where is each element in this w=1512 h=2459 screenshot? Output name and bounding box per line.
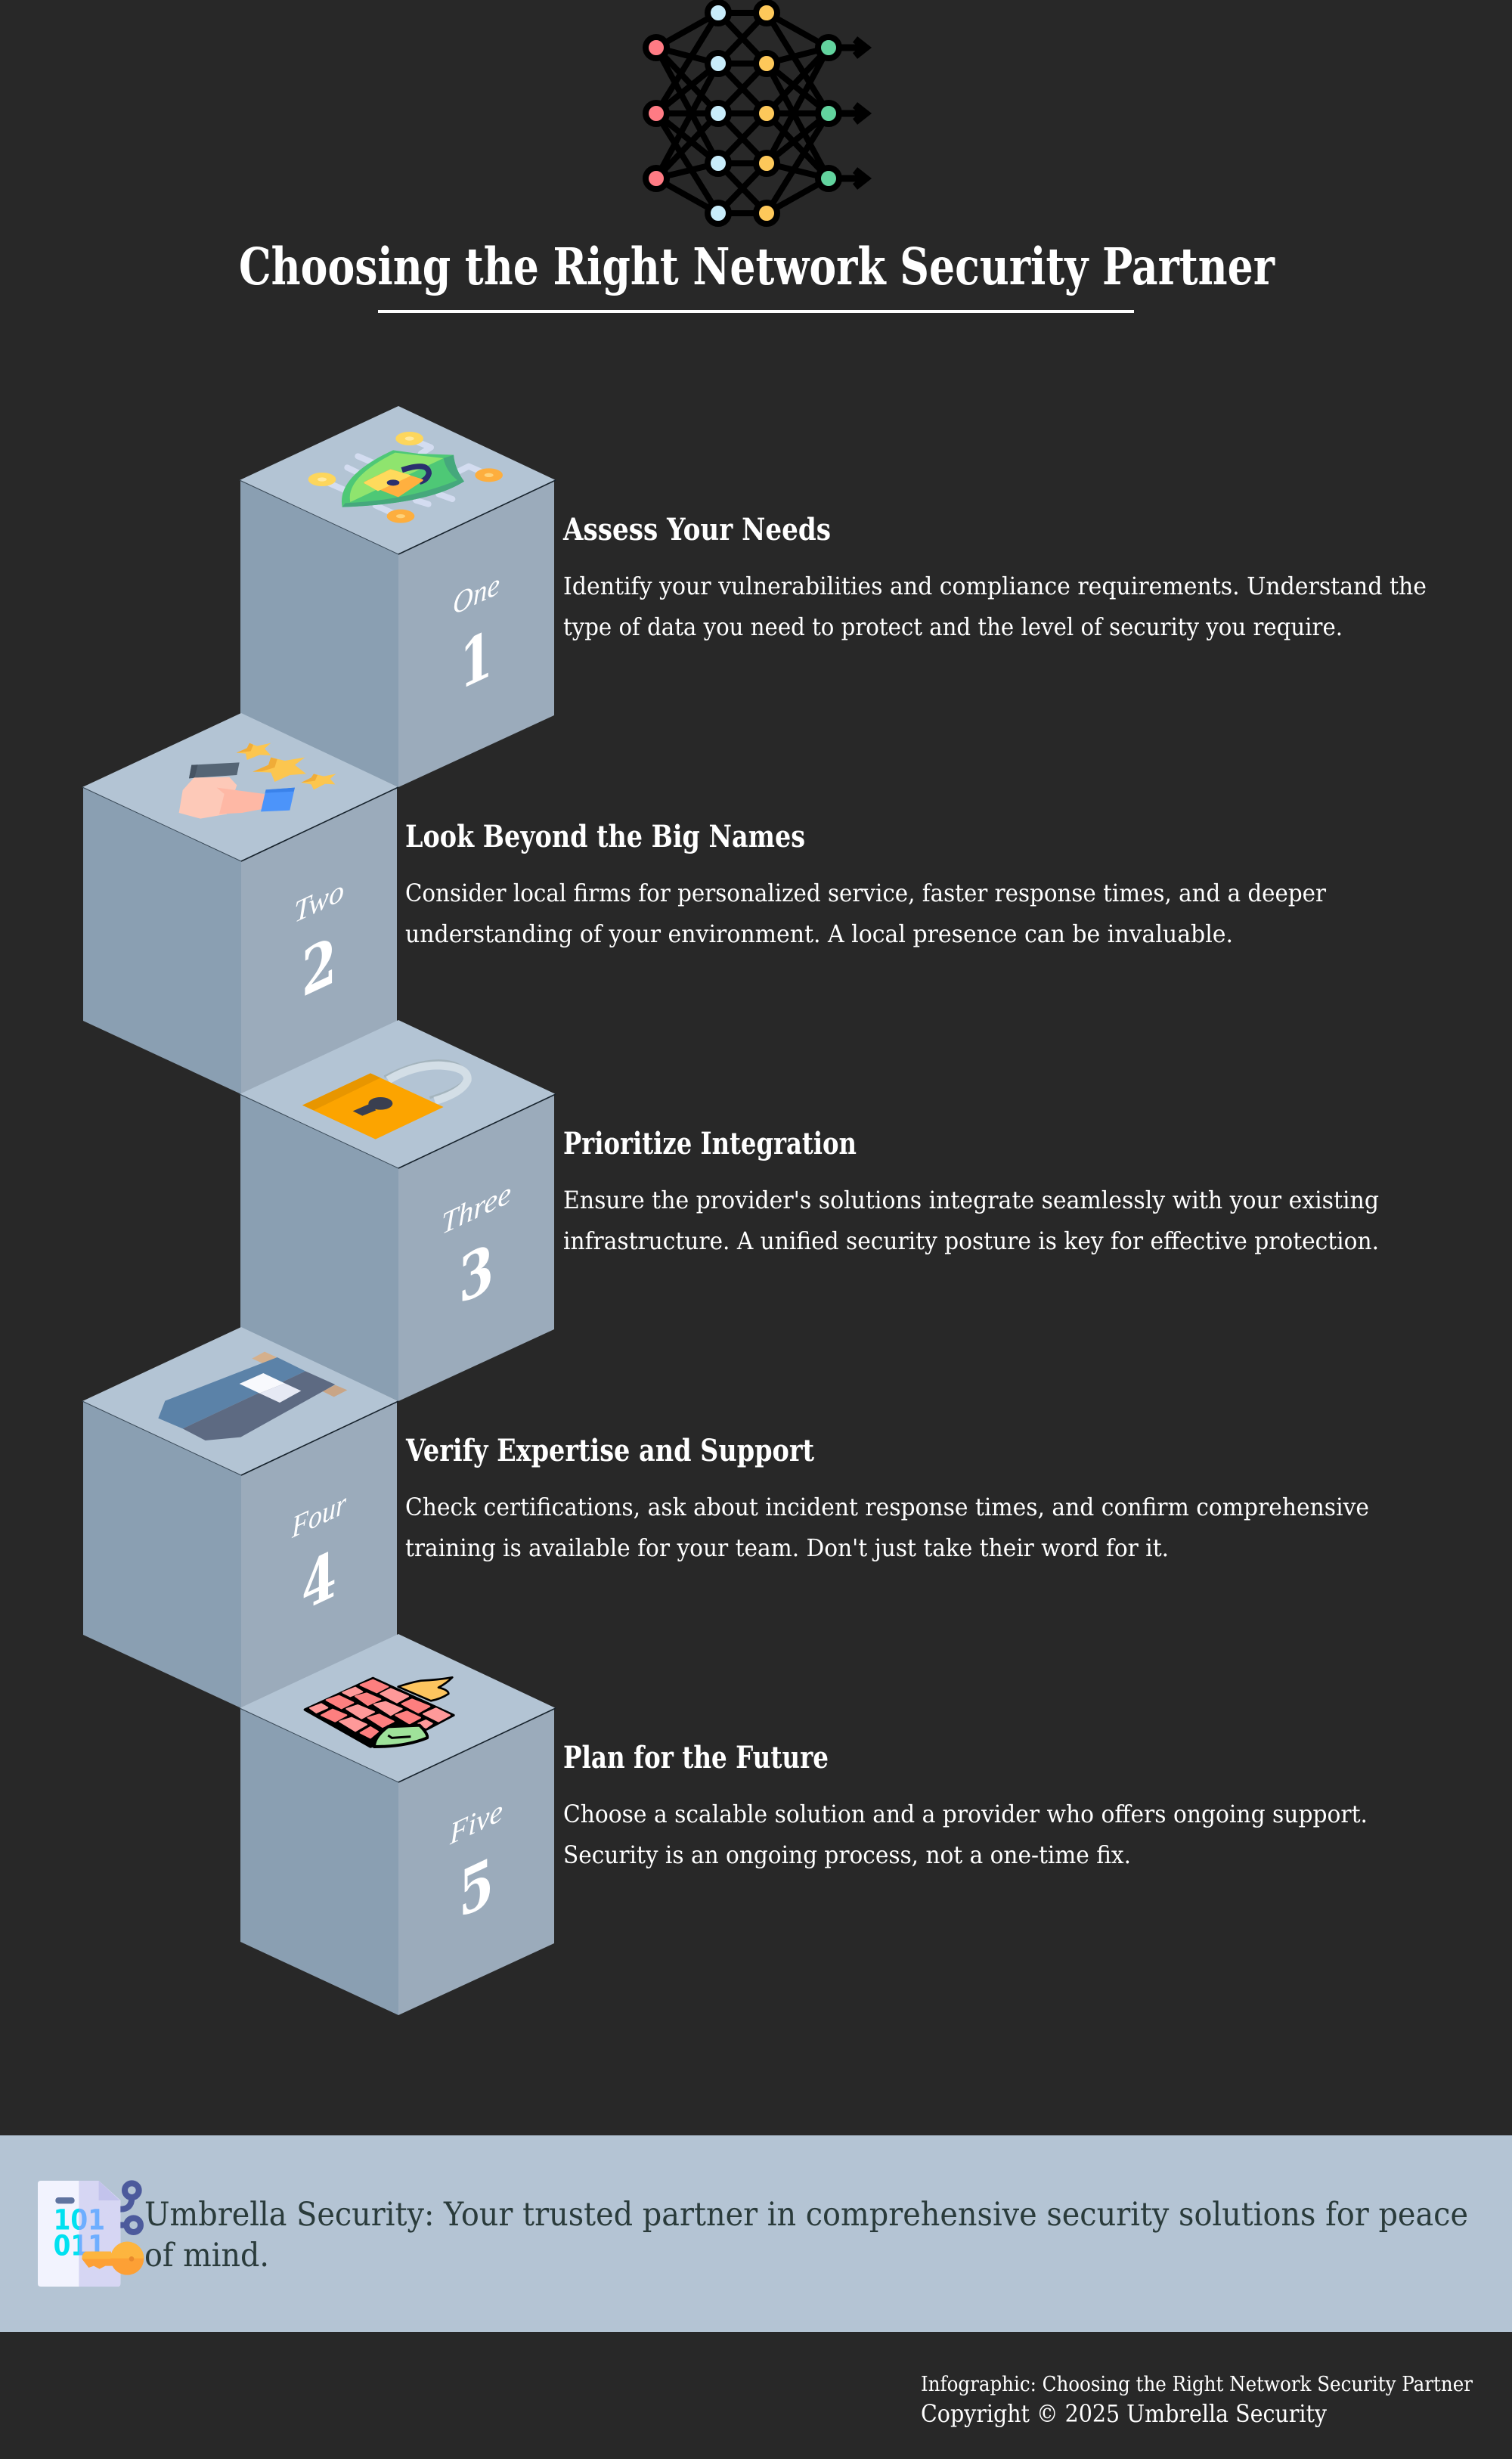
step 3 text: Prioritize Integration: [563, 1126, 857, 1161]
step number: 1: 1: [460, 615, 493, 705]
step 5 text: Choose a scalable solution and a provider who offers ongoing support.: [563, 1800, 1368, 1828]
step 3 text: Ensure the provider's solutions integrate seamlessly with your existing: [563, 1186, 1379, 1214]
step label: Two: Two: [294, 873, 344, 930]
icon: neural network: [646, 2, 866, 224]
cube 4: [82, 1327, 398, 1708]
icon: binary document with key: 011: [54, 2229, 105, 2262]
banner text: of mind.: [144, 2237, 269, 2274]
footer text: [921, 2373, 1473, 2428]
step 1 text: Identify your vulnerabilities and compliance requirements. Understand the: [563, 572, 1427, 600]
step number: 3: 3: [459, 1228, 494, 1319]
banner: [0, 2135, 1512, 2332]
step 5 text: Plan for the Future: [563, 1740, 829, 1775]
cube 1: [240, 406, 556, 787]
footer text: Copyright © 2025 Umbrella Security: [921, 2399, 1327, 2428]
step 5 text: [563, 1740, 1368, 1869]
step 3 text: infrastructure. A unified security posture is key for effective protection.: [563, 1226, 1379, 1255]
step label: Three: Three: [442, 1175, 511, 1242]
step 5 text: Security is an ongoing process, not a one-time fix.: [563, 1840, 1131, 1869]
cube 5: [240, 1634, 556, 2015]
title: Choosing the Right Network Security Partner: [239, 237, 1275, 296]
step 2 text: [405, 819, 1327, 948]
icon: padlock: [302, 1061, 467, 1140]
step number: 2: 2: [302, 921, 336, 1012]
icon: firewall: [305, 1677, 454, 1747]
icon: handshake with stars: [179, 743, 336, 819]
step label: Four: Four: [291, 1486, 346, 1546]
step number: 5: 5: [459, 1842, 494, 1933]
step 1 text: type of data you need to protect and the level of security you require.: [563, 612, 1343, 641]
cube 2: [82, 713, 398, 1094]
step 2 text: understanding of your environment. A local presence can be invaluable.: [405, 919, 1233, 948]
icon: binary document with key: 101: [54, 2203, 105, 2236]
step 4 text: training is available for your team. Don't just take their word for it.: [405, 1533, 1169, 1562]
step 4 text: Check certifications, ask about incident response times, and confirm comprehensive: [405, 1493, 1369, 1521]
step 4 text: [405, 1433, 1369, 1562]
step label: Five: Five: [449, 1793, 503, 1852]
icon: binary document with key: [38, 2181, 144, 2287]
step 4 text: Verify Expertise and Support: [405, 1433, 814, 1468]
icon: shield with lock: [308, 432, 503, 523]
step 3 text: [563, 1126, 1379, 1255]
step 2 text: Consider local firms for personalized service, faster response times, and a deeper: [405, 879, 1327, 907]
step label: One: One: [453, 566, 500, 622]
step number: 4: 4: [302, 1535, 336, 1626]
icon: business suit: [158, 1352, 347, 1440]
cube 3: [240, 1020, 556, 1401]
step 2 text: Look Beyond the Big Names: [405, 819, 805, 854]
footer text: Infographic: Choosing the Right Network Security Partner: [921, 2373, 1473, 2396]
step 1 text: Assess Your Needs: [562, 512, 831, 547]
step 1 text: [562, 512, 1427, 641]
banner text: [144, 2196, 1468, 2274]
